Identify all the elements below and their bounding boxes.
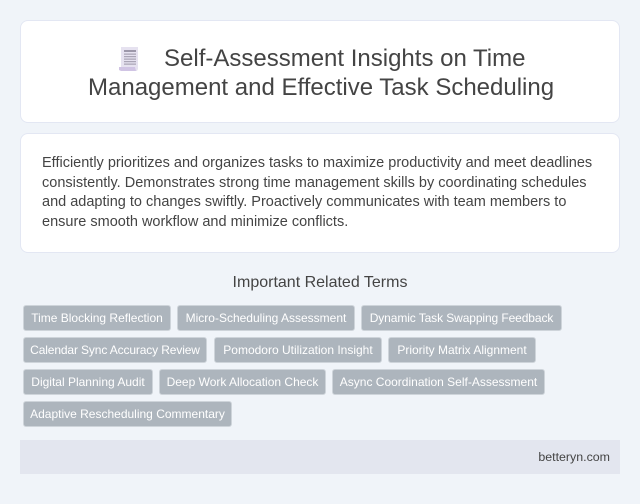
tag <box>332 369 545 395</box>
description text <box>42 155 592 230</box>
tag: Async Coordination Self-Assessment <box>340 375 537 389</box>
panel: title card <box>20 20 620 123</box>
tag: Dynamic Task Swapping Feedback <box>370 311 553 325</box>
title: Self-Assessment Insights on Time <box>164 45 525 72</box>
tag: Calendar Sync Accuracy Review <box>30 343 200 357</box>
description text: and adapting to changes swiftly. Proactively communicates with team members to <box>42 194 566 210</box>
panel: description card <box>20 133 620 253</box>
tag: Micro-Scheduling Assessment <box>186 311 346 325</box>
heading: related terms: Important Related Terms <box>233 274 407 291</box>
tag <box>388 337 536 363</box>
tag <box>159 369 326 395</box>
title: Management and Effective Task Scheduling <box>88 74 554 101</box>
tag: Deep Work Allocation Check <box>167 375 318 389</box>
tag: Adaptive Rescheduling Commentary <box>30 407 225 421</box>
tag <box>23 337 207 363</box>
footer source text: betteryn.com <box>538 450 610 464</box>
tag <box>361 305 562 331</box>
tag: Time Blocking Reflection <box>31 311 163 325</box>
tag <box>23 401 232 427</box>
tag <box>23 305 171 331</box>
footer bar <box>20 440 620 474</box>
description text: Efficiently prioritizes and organizes tasks to maximize productivity and meet deadlines <box>42 155 592 171</box>
title <box>88 45 554 101</box>
tag <box>214 337 382 363</box>
tag: Digital Planning Audit <box>31 375 145 389</box>
description text: ensure smooth workflow and minimize conflicts. <box>42 214 348 230</box>
icon: scroll document <box>119 47 138 71</box>
tag: Pomodoro Utilization Insight <box>223 343 373 357</box>
tag list <box>23 305 562 427</box>
description text: consistently. Demonstrates strong time management skills by coordinating schedules <box>42 174 587 190</box>
tag <box>23 369 153 395</box>
tag: Priority Matrix Alignment <box>397 343 527 357</box>
tag <box>177 305 355 331</box>
